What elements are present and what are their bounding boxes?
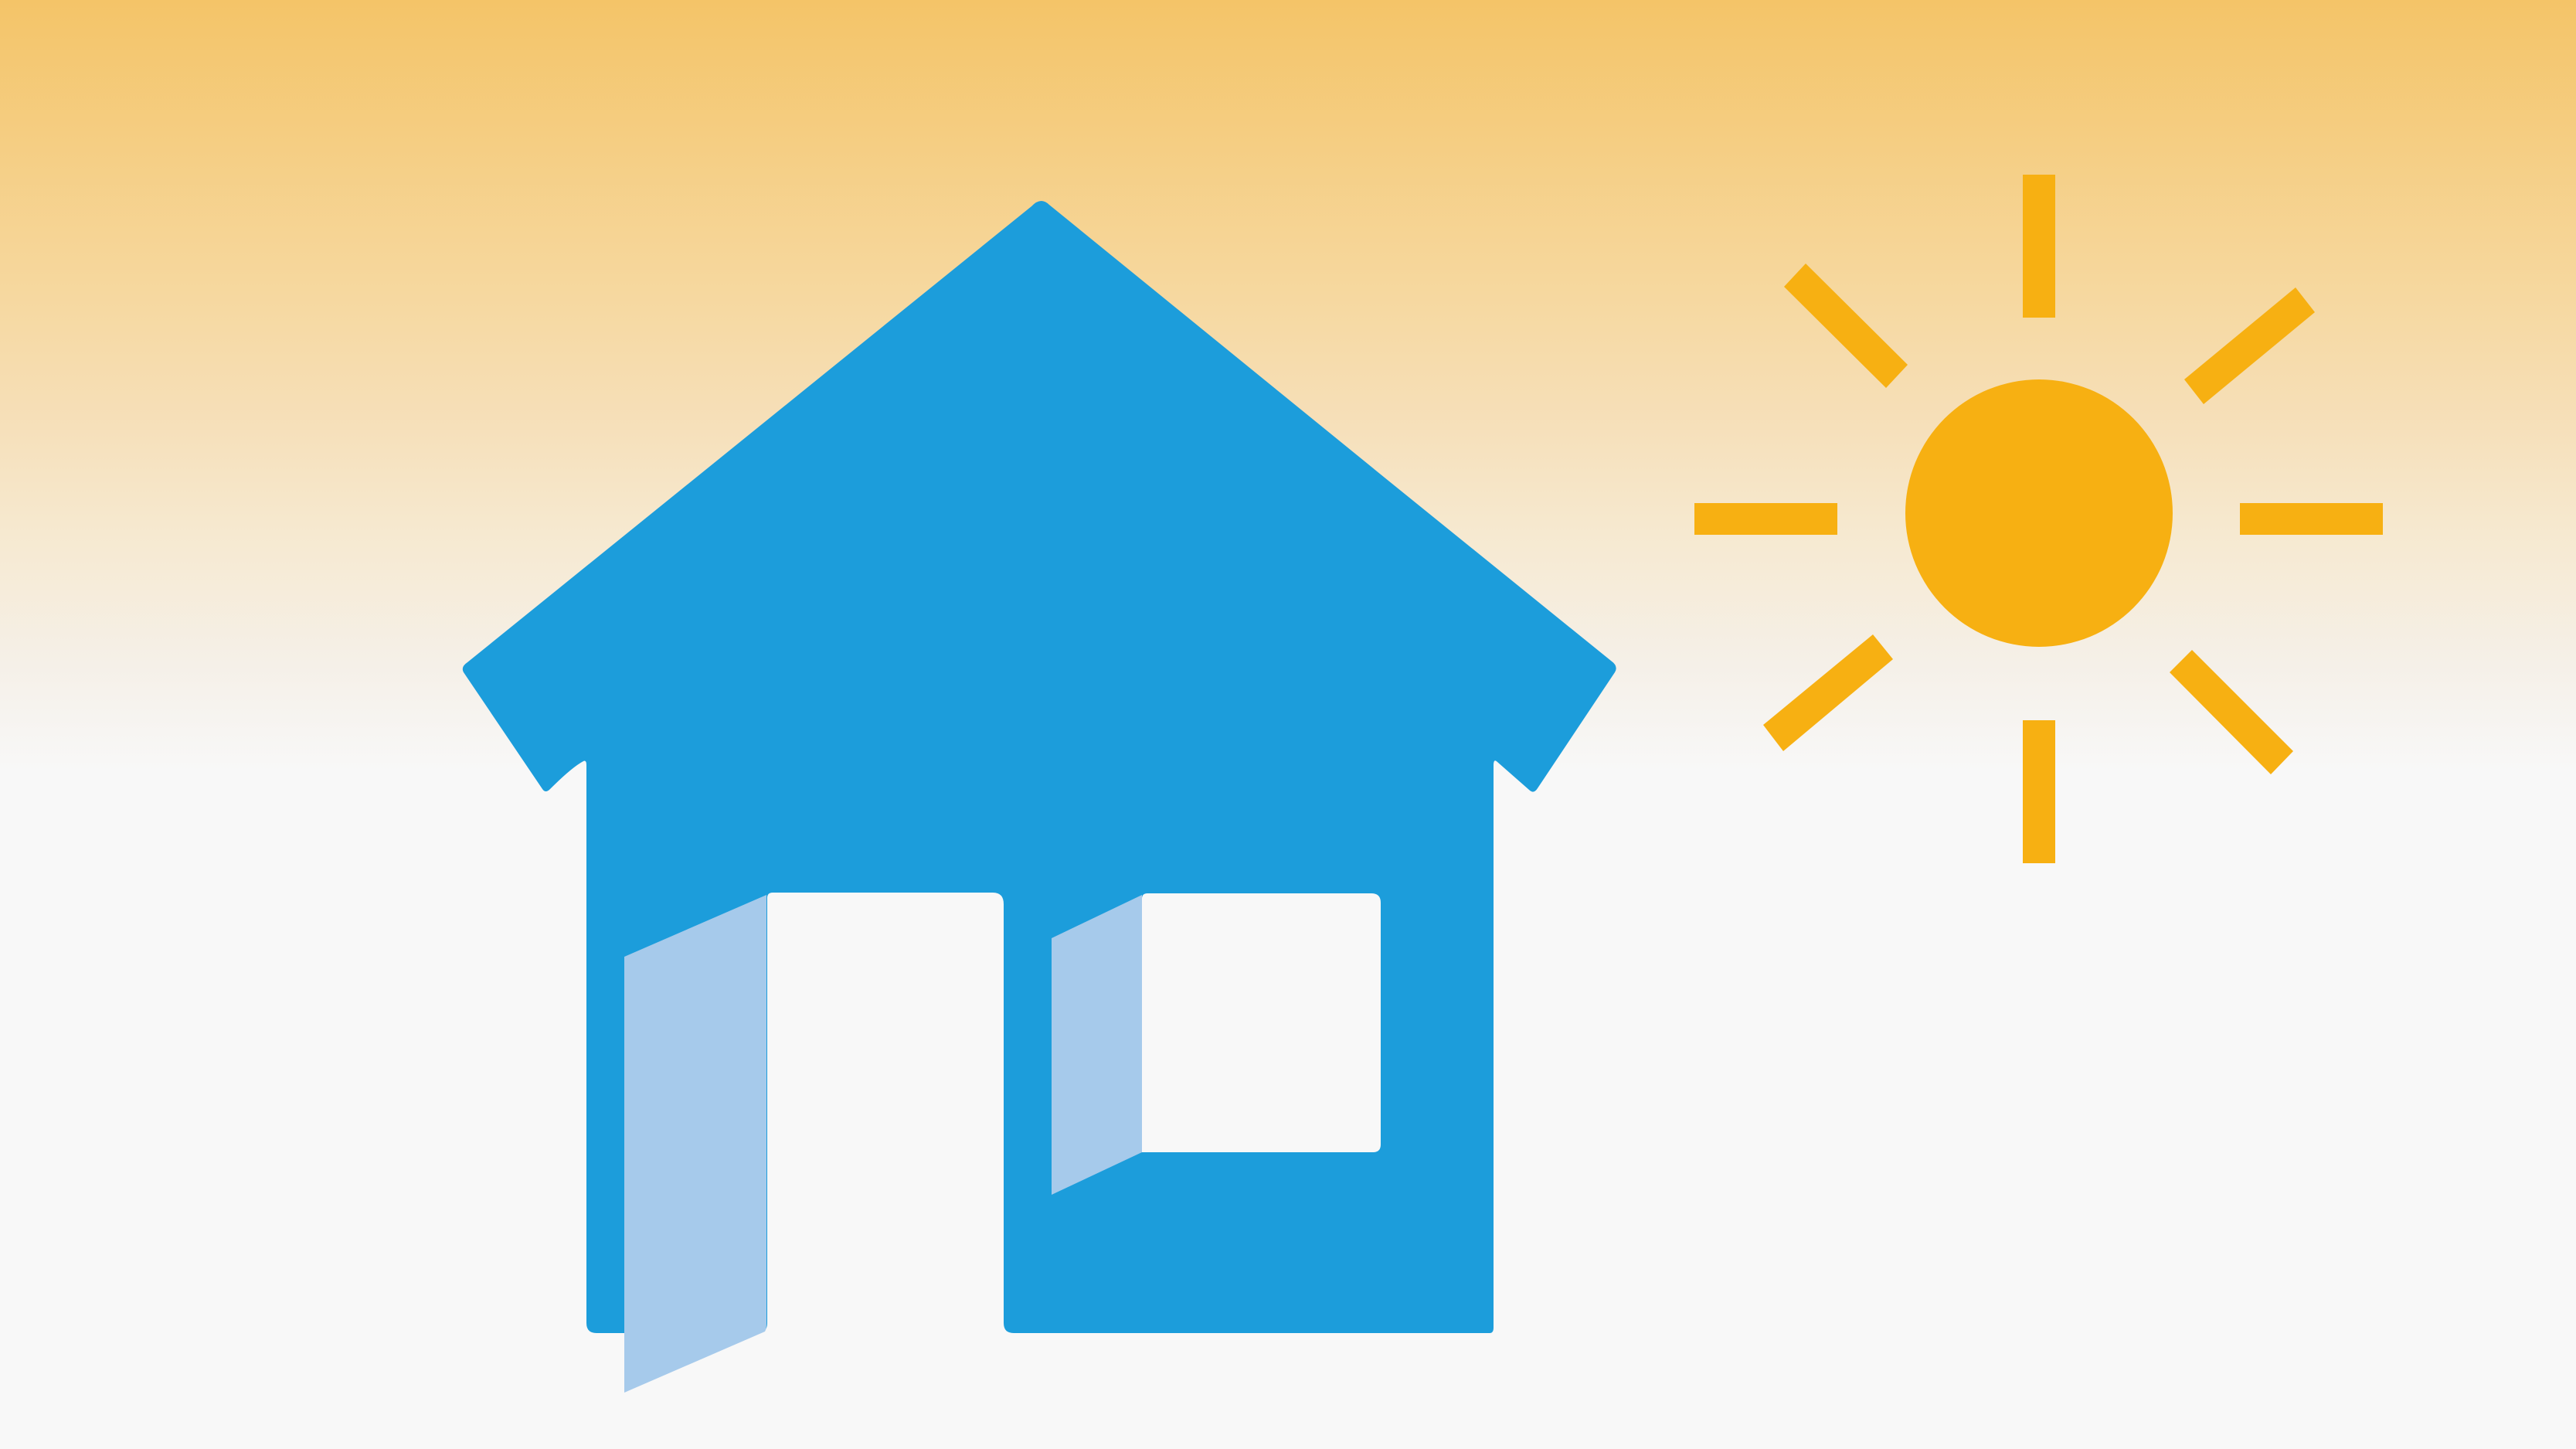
ray: right: [2240, 503, 2383, 535]
house silhouette: [463, 201, 1616, 1333]
ray: bottom: [2023, 720, 2055, 863]
ray: left: [1694, 503, 1837, 535]
ray: upper right: [2184, 287, 2315, 404]
sky gradient: [0, 0, 2576, 773]
ray: top: [2023, 175, 2055, 318]
icon: sun: [1694, 175, 2383, 863]
ray: lower right: [2170, 650, 2293, 774]
ray: upper left: [1784, 264, 1908, 388]
ray: lower left: [1763, 634, 1893, 751]
open window shutter: [1052, 895, 1142, 1195]
icon: house: [463, 201, 1616, 1393]
open door panel: [624, 895, 766, 1393]
sun disc: [1905, 379, 2173, 647]
